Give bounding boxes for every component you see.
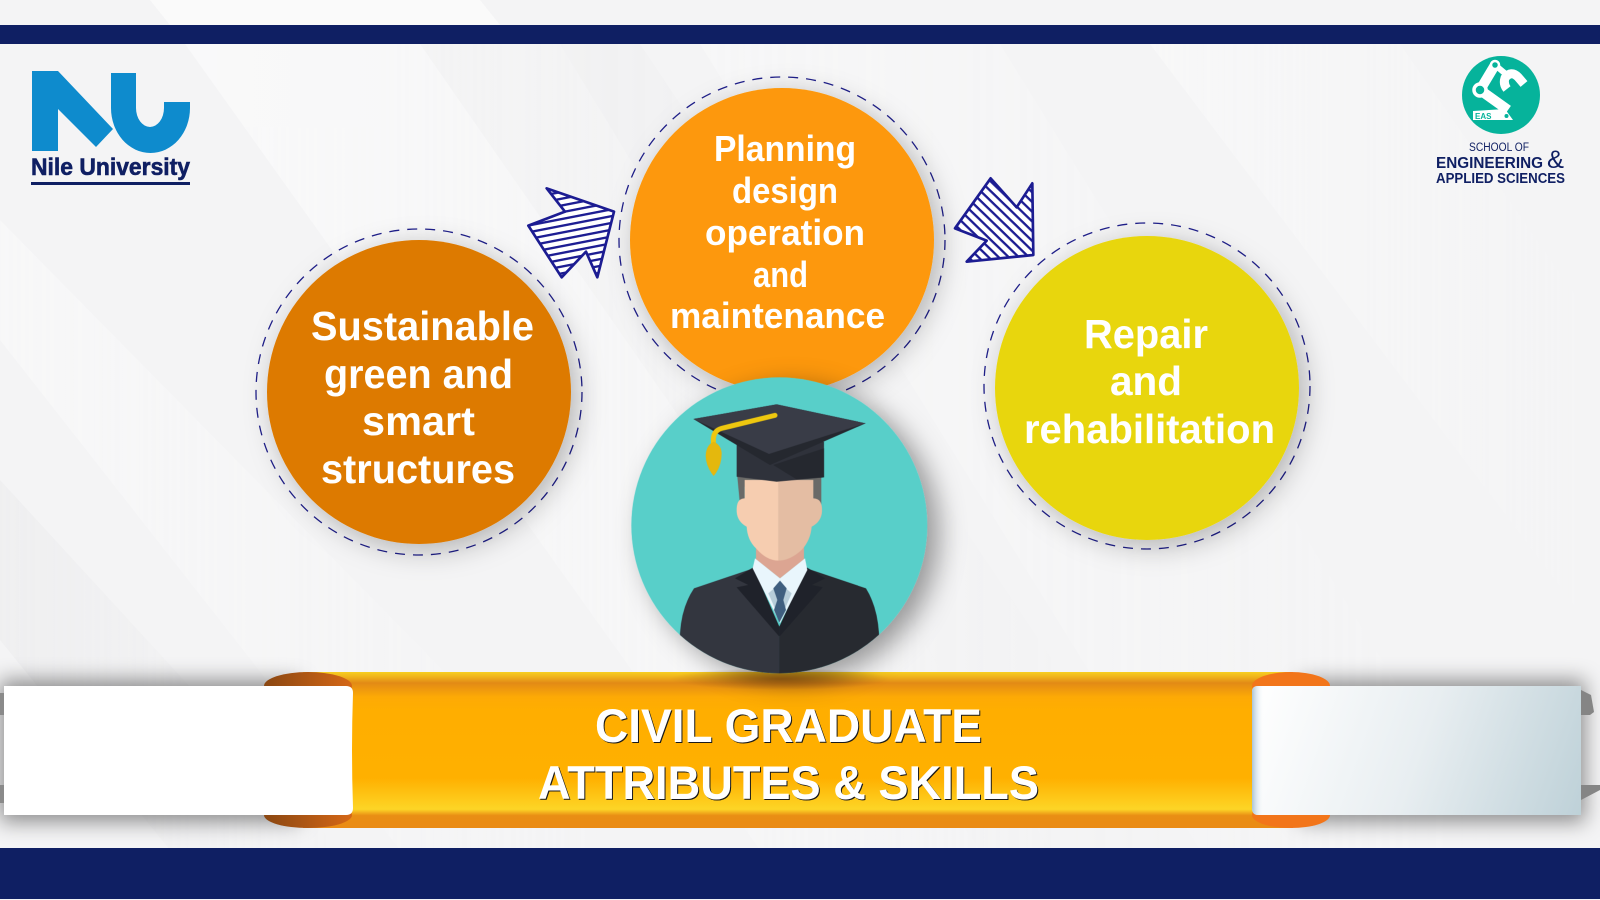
circle: Repair and rehabilitation: Repair (1084, 311, 1208, 357)
circle: Sustainable green and smart structures (256, 229, 582, 555)
panel: right grey tab (1252, 686, 1581, 815)
circle: Sustainable green and smart structures: Sustainable (311, 303, 534, 349)
circle: Planning design operation and maintenance: and (753, 254, 808, 295)
logo: Nile University (31, 71, 191, 185)
arrow: second hatched arrow (955, 178, 1033, 262)
face (737, 480, 822, 578)
cap (693, 404, 866, 482)
circle: Repair and rehabilitation: rehabilitation (1024, 406, 1275, 452)
logo: Nile University: Nile University (31, 154, 191, 181)
circle: Planning design operation and maintenance: Planning (714, 128, 856, 169)
graduate illustration (631, 377, 927, 677)
logo: School of Engineering and Applied Sciences (1436, 56, 1565, 187)
gown (680, 567, 879, 677)
logo: School of Engineering and Applied Sciences: & (1547, 146, 1564, 174)
banner: left fold edges (0, 693, 5, 803)
circle: Repair and rehabilitation: and (1110, 358, 1182, 404)
circle: Planning design operation and maintenance: operation (705, 212, 865, 253)
top navy bar (0, 25, 1600, 44)
banner: right fold edges (1581, 690, 1600, 800)
circle: Sustainable green and smart structures: smart (362, 398, 475, 444)
banner: tab shadows (0, 680, 1585, 822)
logo: School of Engineering and Applied Sciences: APPLIED SCIENCES (1436, 171, 1565, 187)
circle: Sustainable green and smart structures: green and (324, 351, 513, 397)
circle: Sustainable green and smart structures: structures (321, 446, 515, 492)
circle: Planning design operation and maintenance: design (732, 170, 838, 211)
logo: School of Engineering and Applied Sciences: EAS (1475, 112, 1492, 121)
arrow: first hatched arrow (528, 188, 614, 277)
shirt and tie (753, 558, 807, 623)
bottom navy bar (0, 848, 1600, 899)
title (538, 699, 1039, 809)
logo: School of Engineering and Applied Sciences: ENGINEERING (1436, 155, 1543, 172)
logo: School of Engineering and Applied Sciences: SCHOOL OF (1469, 142, 1529, 154)
title: ATTRIBUTES & SKILLS (538, 756, 1039, 809)
circle: Planning design operation and maintenance: maintenance (670, 295, 885, 336)
circle: Planning design operation and maintenance (619, 77, 945, 403)
hair (737, 477, 821, 505)
circle: Repair and rehabilitation (984, 223, 1310, 549)
title: CIVIL GRADUATE (595, 699, 982, 752)
banner: ribbon (264, 668, 1330, 828)
panel: left white tab (4, 686, 353, 815)
